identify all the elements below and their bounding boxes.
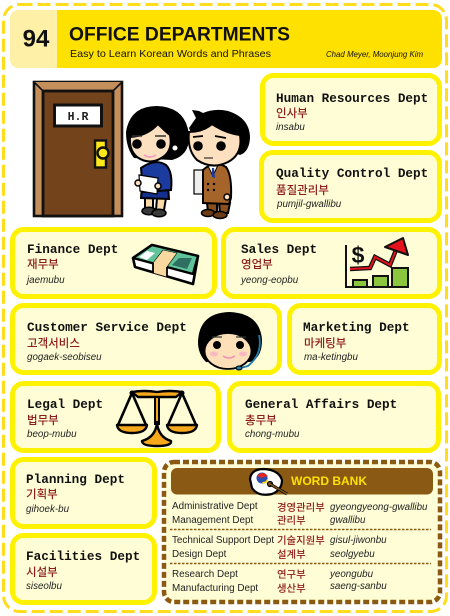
card: planning: gihoek-bu [26, 504, 70, 515]
card: facilities: Facilities Dept [26, 549, 140, 564]
card: sales: Sales Dept [241, 242, 317, 257]
card: human resources [262, 76, 440, 144]
icon: sales growth chart: $ [352, 242, 365, 268]
card: quality control: pumjil-gwallibu [276, 199, 342, 210]
card: human resources: insabu [276, 122, 305, 133]
card: human resources: 인사부 [276, 107, 308, 120]
word bank entries: seolgyebu [330, 549, 375, 560]
card: customer service: Customer Service Dept [27, 320, 187, 335]
card: planning [12, 460, 154, 526]
word bank entries: saeng-sanbu [330, 581, 387, 592]
card: customer service: 고객서비스 [27, 337, 80, 350]
card: facilities: siseolbu [26, 581, 62, 592]
card: finance: jaemubu [25, 275, 65, 286]
word bank entries: Research Dept [172, 569, 238, 580]
word bank entries: 연구부 [277, 568, 306, 581]
credits: Chad Meyer, Moonjung Kim [326, 50, 423, 59]
card: finance: Finance Dept [27, 242, 118, 257]
card: human resources: Human Resources Dept [276, 91, 428, 106]
card: finance: 재무부 [27, 258, 59, 271]
illustration: HR office door [34, 82, 122, 216]
card: marketing: 마케팅부 [304, 336, 347, 350]
word bank entries: yeongubu [329, 569, 374, 580]
illustration: man [189, 110, 250, 218]
word bank entries: 생산부 [277, 583, 306, 595]
card: customer service [12, 306, 280, 372]
card: facilities: 시설부 [26, 566, 58, 579]
icon: scales of justice [117, 390, 197, 446]
man hair [189, 110, 250, 155]
card: marketing: ma-ketingbu [304, 352, 358, 363]
card: sales: yeong-eopbu [240, 275, 299, 286]
card: facilities [12, 536, 154, 602]
word bank entries: gyeongyeong-gwallibu [330, 502, 428, 513]
card: planning: 기획부 [26, 488, 58, 501]
card: general affairs [230, 384, 438, 450]
word bank entries [170, 501, 431, 595]
icon: sales growth chart [346, 238, 409, 287]
icon: call-centre agent [198, 312, 262, 370]
card: sales [224, 230, 440, 296]
word bank entries: Technical Support Dept [172, 535, 274, 546]
word bank entries: Administrative Dept [172, 501, 258, 512]
card: general affairs: General Affairs Dept [245, 397, 397, 412]
card: legal: 법무부 [27, 414, 59, 427]
subtitle: Easy to Learn Korean Words and Phrases [70, 48, 271, 60]
card: sales: 영업부 [241, 258, 273, 271]
door sign: H.R [68, 111, 88, 124]
card: marketing: Marketing Dept [303, 320, 410, 335]
lesson number: 94 [23, 26, 50, 52]
card: general affairs: chong-mubu [245, 429, 300, 440]
icon: traditional fan [250, 469, 287, 495]
card: legal [12, 384, 218, 450]
word bank entries: 설계부 [277, 549, 306, 561]
card: quality control: Quality Control Dept [276, 166, 428, 181]
card: general affairs: 총무부 [245, 414, 277, 427]
panel: word bank [164, 462, 440, 602]
word bank header [171, 468, 433, 494]
card: finance [12, 230, 214, 296]
card: quality control: 품질관리부 [276, 184, 329, 197]
icon: stack of money [133, 245, 198, 284]
card: quality control [262, 152, 440, 220]
card: legal: beop-mubu [27, 429, 77, 440]
word bank entries: Management Dept [172, 515, 253, 526]
word bank entries: Manufacturing Dept [172, 583, 258, 594]
card: planning: Planning Dept [26, 472, 125, 487]
word bank entries: 관리부 [277, 515, 306, 527]
word bank entries: gwallibu [330, 515, 366, 526]
illustration: woman [126, 106, 189, 217]
word bank entries: 기술지원부 [277, 534, 325, 547]
title: OFFICE DEPARTMENTS [69, 24, 290, 46]
word bank title: WORD BANK [291, 474, 367, 488]
card: legal: Legal Dept [27, 397, 103, 412]
word bank entries: Design Dept [172, 549, 227, 560]
card: marketing [290, 306, 440, 372]
word bank entries: 경영관리부 [277, 501, 325, 514]
header banner [10, 10, 442, 68]
card: customer service: gogaek-seobiseu [27, 352, 102, 363]
woman hair [126, 106, 189, 160]
word bank entries: gisul-jiwonbu [330, 535, 387, 546]
